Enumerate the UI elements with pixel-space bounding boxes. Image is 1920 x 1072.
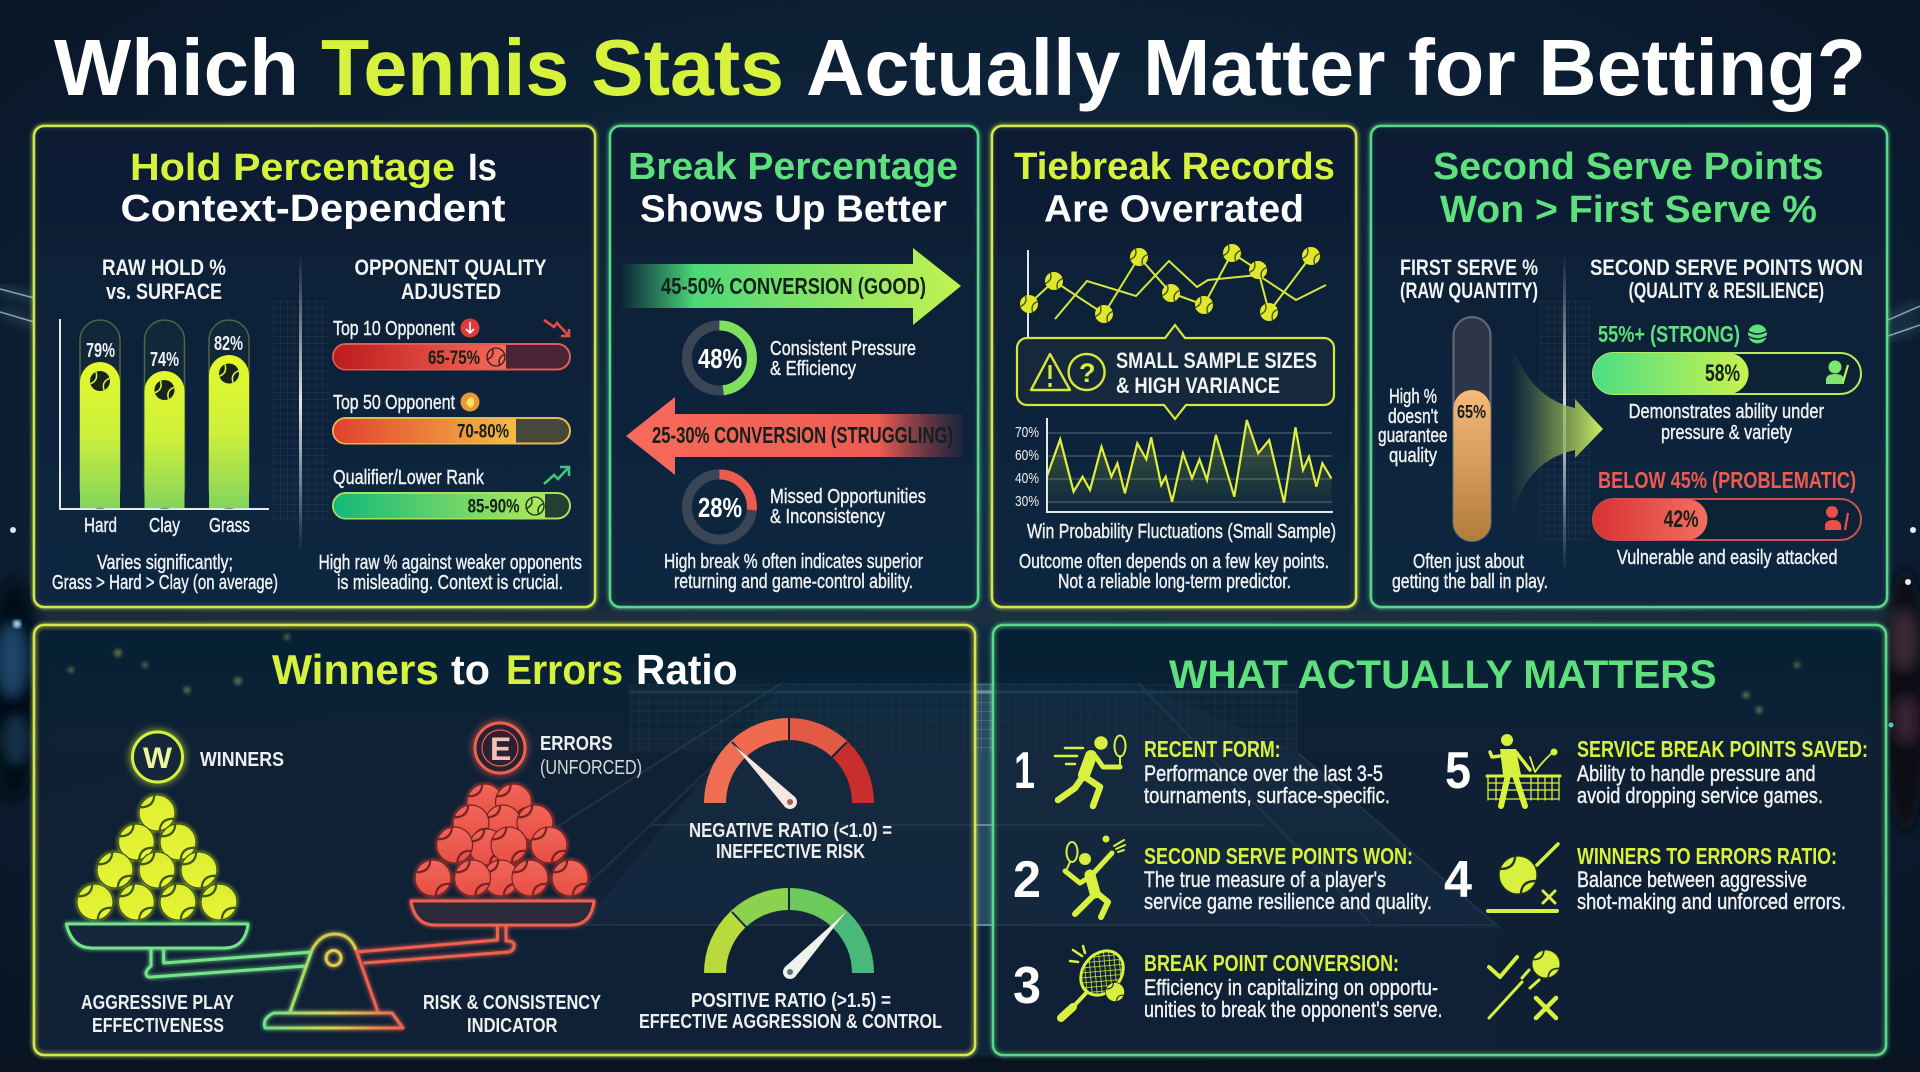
donut: 28% <box>687 474 752 540</box>
item 3: break point conversion: BREAK POINT CONVERSION: <box>1144 950 1399 976</box>
label: aggressive play: AGGRESSIVE PLAY <box>81 992 235 1014</box>
subheading: raw hold: RAW HOLD % <box>102 255 226 280</box>
bar: qualifier / lower rank: 85-90% <box>468 497 520 518</box>
item 4: winners to errors ratio: WINNERS TO ERRORS RATIO: <box>1577 843 1837 869</box>
item 2: second serve points: The true measure of a player's <box>1144 867 1386 892</box>
caption: surface: Varies significantly; <box>97 552 233 574</box>
subheading: second serve: (QUALITY & RESILIENCE) <box>1629 278 1824 303</box>
bar: top 50 opponent <box>333 392 570 444</box>
bar chart: hold by surface: 74% <box>150 349 179 371</box>
bar: problematic second serve: BELOW 45% (PROBLEMATIC) <box>1598 467 1856 493</box>
bar: top 50 opponent: Top 50 Opponent <box>333 392 455 414</box>
subheading: second serve: SECOND SERVE POINTS WON <box>1590 255 1863 280</box>
panel: break percentage <box>610 126 978 607</box>
gauge: negative ratio: INEFFECTIVE RISK <box>716 841 865 863</box>
bar: problematic second serve <box>1593 467 1861 569</box>
callout: small sample sizes: ? <box>1079 358 1096 388</box>
caption: surface: Grass > Hard > Clay (on average) <box>52 572 278 594</box>
panel heading: Won > First Serve % <box>1440 189 1817 231</box>
subheading: first serve: FIRST SERVE % <box>1400 255 1538 280</box>
bar chart: hold by surface: 79% <box>86 340 115 362</box>
panel heading: Hold Percentage <box>130 147 455 189</box>
panel heading: Shows Up Better <box>640 189 947 231</box>
gauge: positive ratio: EFFECTIVE AGGRESSION & CONTROL <box>639 1011 942 1033</box>
subheading: raw hold <box>102 255 226 304</box>
panel heading: Is <box>468 147 497 189</box>
bar: qualifier / lower rank: Qualifier/Lower Rank <box>333 467 485 489</box>
arrow: struggling conversion <box>626 397 963 475</box>
text: consistent pressure: Consistent Pressure <box>770 338 916 360</box>
caption: opponent: is misleading. Context is crucial. <box>337 572 563 594</box>
item 2: second serve points: service game resilience and quality. <box>1144 889 1432 914</box>
donut: 48% <box>687 326 752 390</box>
item 5: service break points saved: 5 <box>1445 742 1471 800</box>
caption: opponent: High raw % against weaker opponents <box>319 552 582 574</box>
icon: racket and ball <box>1061 942 1132 1018</box>
bar: problematic second serve: Vulnerable and easily attacked <box>1617 547 1838 569</box>
item 2: second serve points: SECOND SERVE POINTS WON: <box>1144 843 1413 869</box>
ball pile: errors <box>415 784 588 896</box>
arrow: good conversion: 45-50% CONVERSION (GOOD) <box>661 273 926 299</box>
callout: small sample sizes: & HIGH VARIANCE <box>1116 373 1280 398</box>
badge: errors: (UNFORCED) <box>540 757 642 779</box>
gauge: negative ratio <box>689 717 892 863</box>
line chart: win probability: 40% <box>1015 470 1039 487</box>
icon: serving player <box>1065 836 1125 917</box>
badge: winners: W <box>143 742 173 775</box>
bar chart: hold by surface <box>60 319 269 537</box>
arrow: good conversion <box>620 248 961 325</box>
panel heading: to <box>451 646 490 693</box>
note: high %: quality <box>1389 445 1437 467</box>
bar chart: hold by surface: Hard <box>84 515 117 537</box>
panel heading: Context-Dependent <box>120 188 506 230</box>
title: Which <box>54 23 299 112</box>
panel heading: Are Overrated <box>1044 189 1304 231</box>
bar chart: hold by surface: Grass <box>209 515 250 537</box>
bar: top 10 opponent <box>333 318 570 370</box>
panel: second serve points <box>1371 126 1887 607</box>
bar: strong second serve: 55%+ (STRONG) <box>1598 321 1740 347</box>
icon: ball check and cross <box>1488 844 1558 911</box>
label: aggressive play <box>81 992 235 1037</box>
donut: 28%: 28% <box>698 492 742 523</box>
caption: first serve: Often just about <box>1413 551 1524 573</box>
bar: top 10 opponent: 65-75% <box>428 348 480 369</box>
item 1: recent form: RECENT FORM: <box>1144 736 1281 762</box>
badge: winners: WINNERS <box>200 749 284 771</box>
arrow: struggling conversion: 25-30% CONVERSION (STRUGGLING) <box>652 422 953 448</box>
caption: tiebreak: Outcome often depends on a few key points. <box>1019 551 1329 573</box>
gauge: first serve capsule: 65% <box>1457 402 1486 422</box>
caption: tiebreak: Not a reliable long-term predictor. <box>1058 571 1291 593</box>
item 1: recent form: 1 <box>1014 742 1035 800</box>
panel heading <box>1433 146 1824 231</box>
panel: tiebreak records <box>992 126 1356 607</box>
item 3: break point conversion: 3 <box>1013 957 1041 1015</box>
badge: errors: ERRORS <box>540 733 612 755</box>
bar chart: hold by surface: 82% <box>214 333 243 355</box>
badge: errors: E <box>490 731 511 767</box>
panel heading: Break Percentage <box>628 146 958 188</box>
item 4: winners to errors ratio: 4 <box>1444 851 1472 909</box>
panel: winners to errors ratio <box>34 625 975 1055</box>
caption: first serve <box>1392 551 1548 593</box>
panel heading: Tiebreak Records <box>1014 146 1335 188</box>
gauge: positive ratio: POSITIVE RATIO (>1.5) = <box>691 990 891 1012</box>
text: missed opportunities: Missed Opportunities <box>770 486 926 508</box>
text: consistent pressure <box>770 338 916 380</box>
caption: break: returning and game-control ability. <box>674 571 913 593</box>
panel heading: Winners <box>272 646 439 693</box>
text: missed opportunities <box>770 486 926 528</box>
bar chart: hold by surface: Clay <box>149 515 180 537</box>
balance scale <box>66 901 594 1028</box>
label: risk and consistency: INDICATOR <box>467 1015 558 1037</box>
item 3: break point conversion <box>1013 942 1442 1022</box>
panel: hold percentage <box>34 126 595 607</box>
label: aggressive play: EFFECTIVENESS <box>92 1015 224 1037</box>
panel heading <box>272 646 738 693</box>
note: high %: doesn't <box>1388 406 1438 428</box>
subheading: opponent quality: ADJUSTED <box>401 279 501 304</box>
bar: strong second serve: pressure & variety <box>1661 422 1792 444</box>
item 5: service break points saved <box>1445 734 1868 808</box>
line chart: win probability <box>1015 418 1336 543</box>
label: risk and consistency <box>423 992 602 1037</box>
bar: strong second serve: Demonstrates ability under <box>1629 401 1824 423</box>
subheading: raw hold: vs. SURFACE <box>106 279 222 304</box>
panel heading <box>120 147 506 230</box>
item 4: winners to errors ratio: Balance between aggressive <box>1577 867 1807 892</box>
bar: problematic second serve: 42% <box>1664 506 1699 533</box>
gauge: negative ratio: NEGATIVE RATIO (<1.0) = <box>689 820 892 842</box>
panel heading: Errors <box>506 646 623 693</box>
caption: break: High break % often indicates superior <box>664 551 923 573</box>
bar: strong second serve <box>1593 321 1861 444</box>
item 1: recent form: Performance over the last 3-5 <box>1144 761 1383 786</box>
text: missed opportunities: & Inconsistency <box>770 506 885 528</box>
item 1: recent form <box>1014 736 1390 808</box>
badge: errors <box>475 723 642 779</box>
panel: what actually matters <box>993 625 1886 1055</box>
item 2: second serve points: 2 <box>1013 851 1041 909</box>
icon: check, ball and cross <box>1489 950 1560 1018</box>
bar: strong second serve: 58% <box>1705 360 1740 387</box>
icon: running player <box>1055 736 1126 806</box>
item 4: winners to errors ratio <box>1444 843 1846 914</box>
badge: winners <box>132 732 284 782</box>
gauge: positive ratio <box>639 887 942 1033</box>
item 1: recent form: tournaments, surface-specific. <box>1144 783 1390 808</box>
bar: qualifier / lower rank <box>333 467 570 518</box>
line chart: win probability: 60% <box>1015 447 1039 464</box>
item 3: break point conversion: Efficiency in capitalizing on opportu- <box>1144 975 1438 1000</box>
panel heading: Second Serve Points <box>1433 146 1824 188</box>
item 5: service break points saved: avoid dropping service games. <box>1577 783 1823 808</box>
subheading: opponent quality: OPPONENT QUALITY <box>354 255 547 280</box>
item 3: break point conversion: unities to break the opponent's serve. <box>1144 997 1442 1022</box>
subheading: first serve: (RAW QUANTITY) <box>1400 278 1538 303</box>
caption: first serve: getting the ball in play. <box>1392 571 1548 593</box>
caption: surface <box>52 552 278 594</box>
chart: tiebreak scatter <box>1020 244 1326 340</box>
bar: top 50 opponent: 70-80% <box>457 422 509 442</box>
line chart: win probability: 30% <box>1015 493 1039 510</box>
line chart: win probability: Win Probability Fluctuations (Small Sample) <box>1027 521 1336 543</box>
title: Tennis Stats <box>321 23 784 112</box>
panel heading: Ratio <box>636 646 738 693</box>
label: risk and consistency: RISK & CONSISTENCY <box>423 992 602 1014</box>
arrow: quantity to quality <box>1510 340 1603 520</box>
gauge: first serve capsule <box>1454 317 1490 541</box>
callout: small sample sizes: SMALL SAMPLE SIZES <box>1116 348 1317 373</box>
caption: opponent <box>319 552 582 594</box>
caption: tiebreak <box>1019 551 1329 593</box>
note: high %: High % <box>1389 386 1437 408</box>
ball pile: winners <box>77 795 237 920</box>
subheading: second serve <box>1590 255 1863 303</box>
line chart: win probability: 70% <box>1015 424 1039 441</box>
text: consistent pressure: & Efficiency <box>770 358 856 380</box>
title: Actually Matter for Betting? <box>806 23 1866 112</box>
donut: 48%: 48% <box>698 343 742 374</box>
item 4: winners to errors ratio: shot-making and unforced errors. <box>1577 889 1846 914</box>
subheading: opponent quality <box>354 255 547 304</box>
callout: small sample sizes <box>1017 325 1334 419</box>
caption: break <box>664 551 923 593</box>
item 5: service break points saved: Ability to handle pressure and <box>1577 761 1816 786</box>
item 2: second serve points <box>1013 836 1432 917</box>
title <box>54 23 1866 112</box>
panel heading <box>1014 146 1335 231</box>
panel heading <box>628 146 958 231</box>
panel heading: WHAT ACTUALLY MATTERS <box>1169 653 1717 697</box>
bar: top 10 opponent: Top 10 Opponent <box>333 318 455 340</box>
note: high % <box>1378 386 1448 467</box>
icon: player at net <box>1487 734 1560 806</box>
subheading: first serve <box>1400 255 1538 303</box>
note: high %: guarantee <box>1378 425 1448 447</box>
